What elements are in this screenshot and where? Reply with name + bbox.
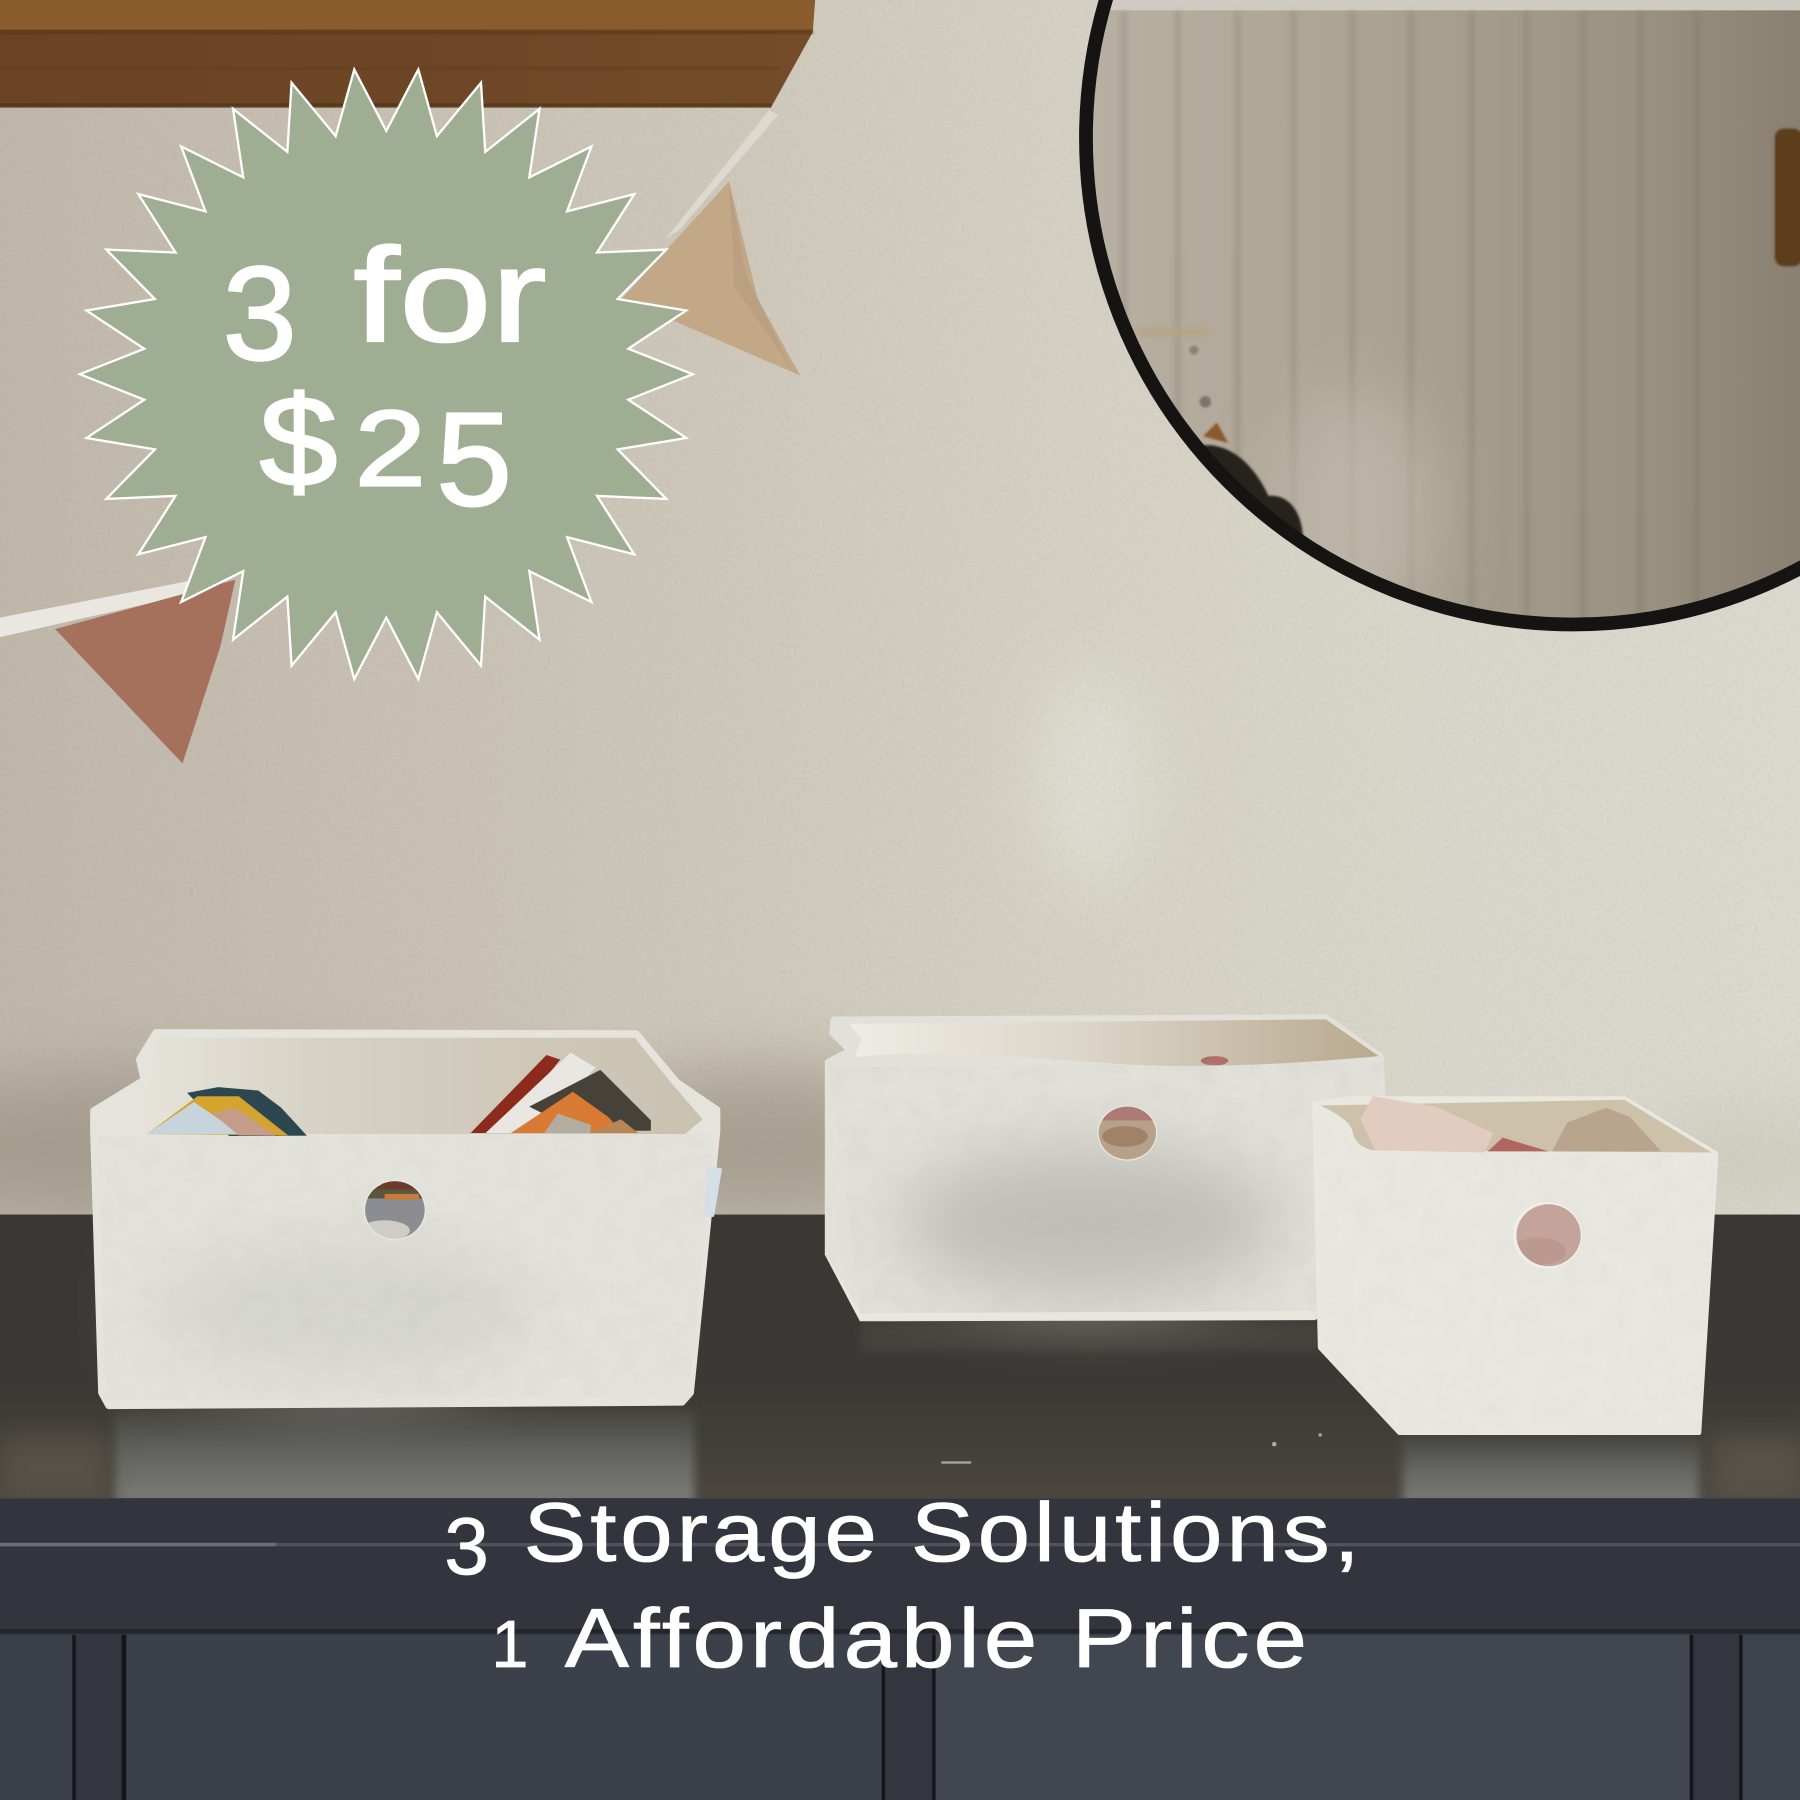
- caption: line one: Storage Solutions,: [523, 1485, 1364, 1579]
- caption: line two: 1: [491, 1608, 528, 1682]
- basket handle hole: [364, 1180, 426, 1240]
- badge text: $25: $: [259, 371, 337, 514]
- basket interior: [1320, 1100, 1712, 1153]
- caption: line two: Affordable Price: [565, 1591, 1311, 1685]
- folded clothes left: [147, 1087, 308, 1136]
- badge text: $25: 5: [436, 385, 512, 534]
- dresser: [0, 1215, 1800, 1800]
- basket handle hole: [1096, 1104, 1159, 1162]
- basket: large middle felt bin: [824, 1017, 1387, 1321]
- basket front panel: [98, 1134, 714, 1401]
- photo background: wall: [0, 0, 1800, 1228]
- basket handle hole: [1511, 1201, 1584, 1270]
- shaded felt front: [901, 1148, 1280, 1297]
- dresser front rail: [0, 1498, 1800, 1632]
- basket interior: [849, 1019, 1379, 1066]
- badge text: $25: 2: [355, 388, 426, 509]
- basket felt texture: [1314, 1119, 1718, 1435]
- badge text: 3 for: [223, 221, 546, 388]
- basket interior: [140, 1038, 703, 1134]
- basket silhouette: [94, 1033, 716, 1405]
- clothes inside small bin: [1360, 1096, 1661, 1153]
- basket: small right felt bin: [1314, 1096, 1718, 1435]
- badge text: 3 for: for: [354, 221, 546, 370]
- starburst shape: [80, 69, 693, 679]
- starburst badge: [80, 69, 693, 679]
- basket label tag: [704, 1165, 722, 1217]
- wooden shelf: [0, 0, 815, 108]
- badge text: $25: [259, 371, 512, 534]
- basket: large left felt bin: [94, 1033, 722, 1405]
- dresser top surface: [0, 1215, 1800, 1498]
- badge text: 3 for: 3: [223, 239, 297, 388]
- bunting garland with fabric flags: [0, 110, 800, 763]
- caption: line one: 3: [444, 1502, 489, 1592]
- round wall mirror: [1079, 0, 1800, 654]
- sparkle flecks on dresser: [941, 1433, 1322, 1464]
- dresser doors and frames: [0, 1629, 1800, 1800]
- folded clothes right: [471, 1053, 651, 1133]
- basket bottom seam: [824, 1254, 1316, 1321]
- basket silhouette: [1314, 1099, 1716, 1433]
- basket silhouette: [828, 1017, 1384, 1318]
- basket reflections on dresser top: [0, 1322, 1800, 1504]
